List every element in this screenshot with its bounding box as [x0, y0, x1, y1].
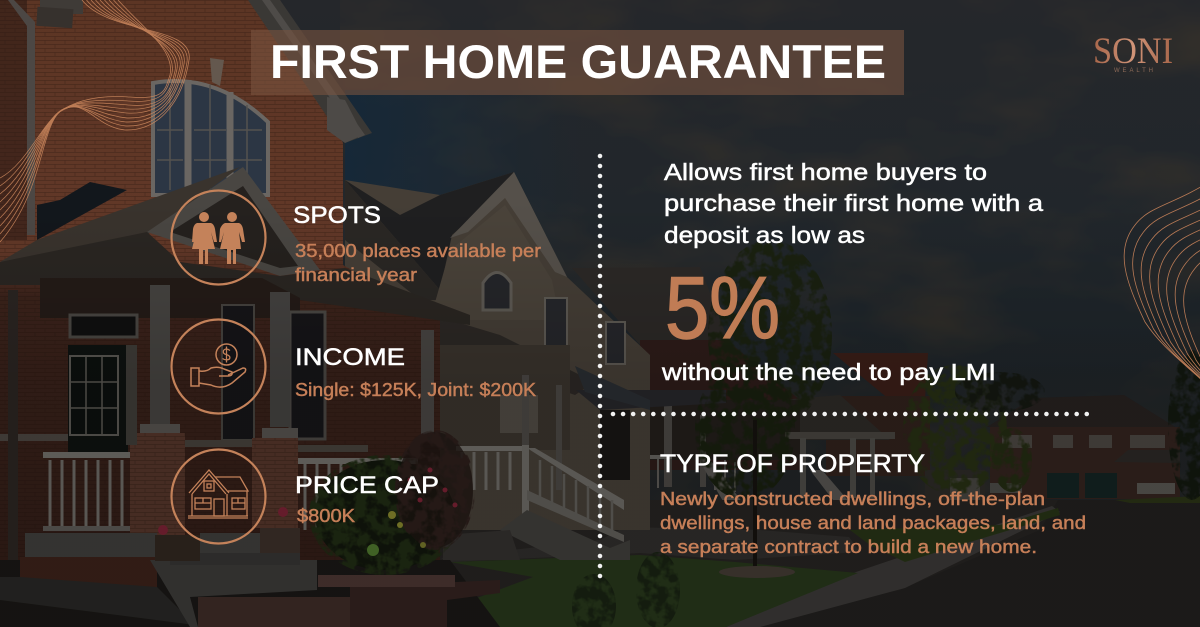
- arched window: [153, 80, 268, 195]
- text: spots detail: [295, 241, 541, 285]
- porch columns and piers: [222, 305, 254, 440]
- text: type of property detail: Newly constructed dwellings, off-the-plan: [660, 489, 1045, 509]
- logo: WEALTH: [1114, 68, 1153, 74]
- text: without LMI: without the need to pay LMI: [661, 359, 996, 385]
- text: deposit intro: purchase their first home with a: [664, 190, 1043, 216]
- text: spots detail: 35,000 places available per: [295, 241, 541, 261]
- door and transom: [68, 345, 128, 453]
- heading: spots: SPOTS: [293, 202, 381, 229]
- shrubs and trees: [158, 240, 1200, 627]
- far right houses: [987, 395, 1180, 499]
- icon: hand holding coin in circle: [172, 320, 266, 414]
- main brick house: [0, 0, 630, 627]
- centre cream house: [345, 172, 726, 530]
- text: type of property detail: [660, 489, 1086, 557]
- item: price cap: [172, 450, 439, 544]
- text: spots detail: financial year: [295, 265, 417, 285]
- text: deposit intro: Allows first home buyers to: [664, 159, 987, 185]
- logo: SONI: [1093, 31, 1173, 72]
- heading: type of property: TYPE OF PROPERTY: [660, 450, 925, 478]
- road, grass and path: [440, 496, 1200, 627]
- title banner: FIRST HOME GUARANTEE: [270, 35, 886, 88]
- text: type of property detail: a separate contract to build a new home.: [660, 537, 1037, 557]
- text: type of property detail: dwellings, house and land packages, land, and: [660, 513, 1086, 533]
- item: spots: [172, 190, 541, 285]
- concrete porch and steps: [0, 560, 500, 627]
- decorative wave lines, right: [1124, 178, 1200, 436]
- railings: [50, 452, 510, 530]
- text: income detail: Single: $125K, Joint: $200K: [295, 380, 536, 400]
- text: price cap detail: $800K: [297, 506, 355, 526]
- item: income: [172, 320, 536, 414]
- decorative wave lines, top left: [0, 0, 189, 242]
- icon: house in circle: [172, 450, 266, 544]
- middle red-roof houses: [572, 267, 985, 555]
- heading: income: INCOME: [295, 344, 405, 371]
- big number: 5%: 5%: [665, 258, 780, 357]
- text: deposit intro: [664, 159, 1043, 248]
- icon: two women in circle: [172, 190, 266, 284]
- vertical dotted divider: [598, 156, 602, 578]
- porch roof and gable: [0, 167, 240, 272]
- text: deposit intro: deposit as low as: [664, 222, 865, 248]
- horizontal dotted divider: [613, 412, 1096, 416]
- overall dimming overlay: [0, 200, 1200, 627]
- heading: price cap: PRICE CAP: [295, 472, 439, 499]
